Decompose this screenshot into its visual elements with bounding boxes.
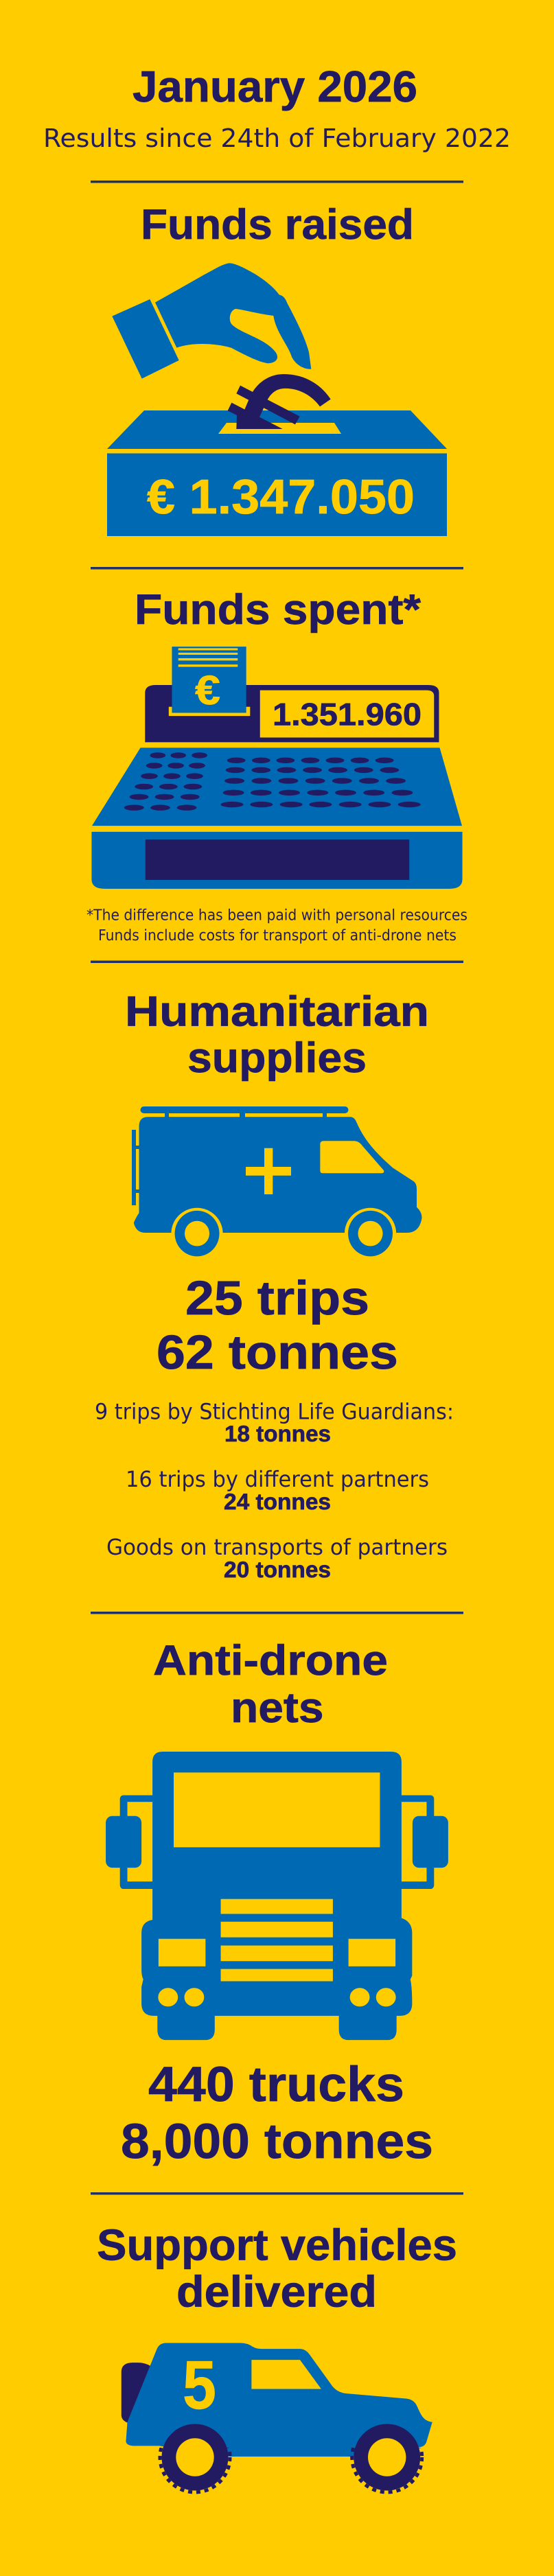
register keypad — [92, 747, 462, 826]
donation box front — [107, 453, 447, 536]
icon: off-road vehicle — [122, 2343, 432, 2492]
heading: anti-drone nets: Anti-drone — [153, 1637, 388, 1684]
stat: trips and tonnes — [157, 1271, 398, 1379]
breakdown list: 9 trips by Stichting Life Guardians: — [95, 1399, 454, 1425]
heading: humanitarian supplies — [125, 988, 429, 1082]
footnote: Funds include costs for transport of anti-drone nets — [98, 927, 457, 944]
receipt — [172, 647, 246, 713]
amount spent: 1.351.960 — [273, 696, 422, 732]
stat: trucks and tonnes — [121, 2057, 433, 2169]
heading: funds raised: Funds raised — [141, 201, 414, 248]
panel: support vehicles — [97, 2220, 457, 2492]
icon: hand — [112, 263, 311, 379]
register display housing — [145, 685, 439, 742]
title: January 2026 — [132, 62, 417, 111]
breakdown list: 20 tonnes — [224, 1557, 331, 1582]
heading: humanitarian supplies: supplies — [187, 1034, 367, 1082]
stat: trucks and tonnes: 440 trucks — [148, 2057, 404, 2112]
footnote — [86, 907, 468, 944]
heading: support vehicles delivered — [97, 2220, 457, 2316]
panel: header — [43, 62, 511, 153]
heading: support vehicles delivered: delivered — [176, 2266, 377, 2316]
breakdown list: 18 tonnes — [224, 1421, 331, 1446]
breakdown list: 24 tonnes — [224, 1489, 331, 1514]
footnote: *The difference has been paid with personal resources — [86, 907, 468, 924]
icon: euro coin — [228, 374, 331, 429]
rear wheel — [160, 2422, 230, 2492]
front wheel — [352, 2422, 422, 2492]
stat: trips and tonnes: 25 trips — [185, 1271, 369, 1325]
breakdown list: 16 trips by different partners — [126, 1466, 429, 1492]
breakdown list — [95, 1399, 454, 1582]
register base — [91, 832, 462, 889]
panel: funds raised — [107, 201, 447, 536]
amount raised: € 1.347.050 — [147, 470, 415, 524]
stat: trucks and tonnes: 8,000 tonnes — [121, 2114, 433, 2169]
heading: anti-drone nets — [153, 1637, 388, 1732]
stat: trips and tonnes: 62 tonnes — [157, 1325, 398, 1379]
icon: cash register — [91, 647, 462, 889]
heading: support vehicles delivered: Support vehicles — [97, 2220, 457, 2269]
panel: funds spent — [86, 586, 468, 944]
heading: humanitarian supplies: Humanitarian — [125, 988, 429, 1035]
vehicle count: 5 — [183, 2347, 216, 2424]
heading: funds spent: Funds spent* — [135, 586, 422, 634]
infographic — [45, 71, 508, 2494]
icon: van — [132, 1106, 422, 1259]
panel: humanitarian supplies — [95, 988, 454, 1582]
heading: anti-drone nets: nets — [231, 1684, 324, 1732]
subtitle: Results since 24th of February 2022 — [43, 124, 511, 153]
receipt: € — [195, 667, 220, 713]
breakdown list: Goods on transports of partners — [106, 1534, 448, 1560]
icon: truck — [106, 1752, 448, 2040]
icon: donation box lid — [107, 410, 447, 449]
panel: anti-drone nets — [106, 1637, 448, 2169]
